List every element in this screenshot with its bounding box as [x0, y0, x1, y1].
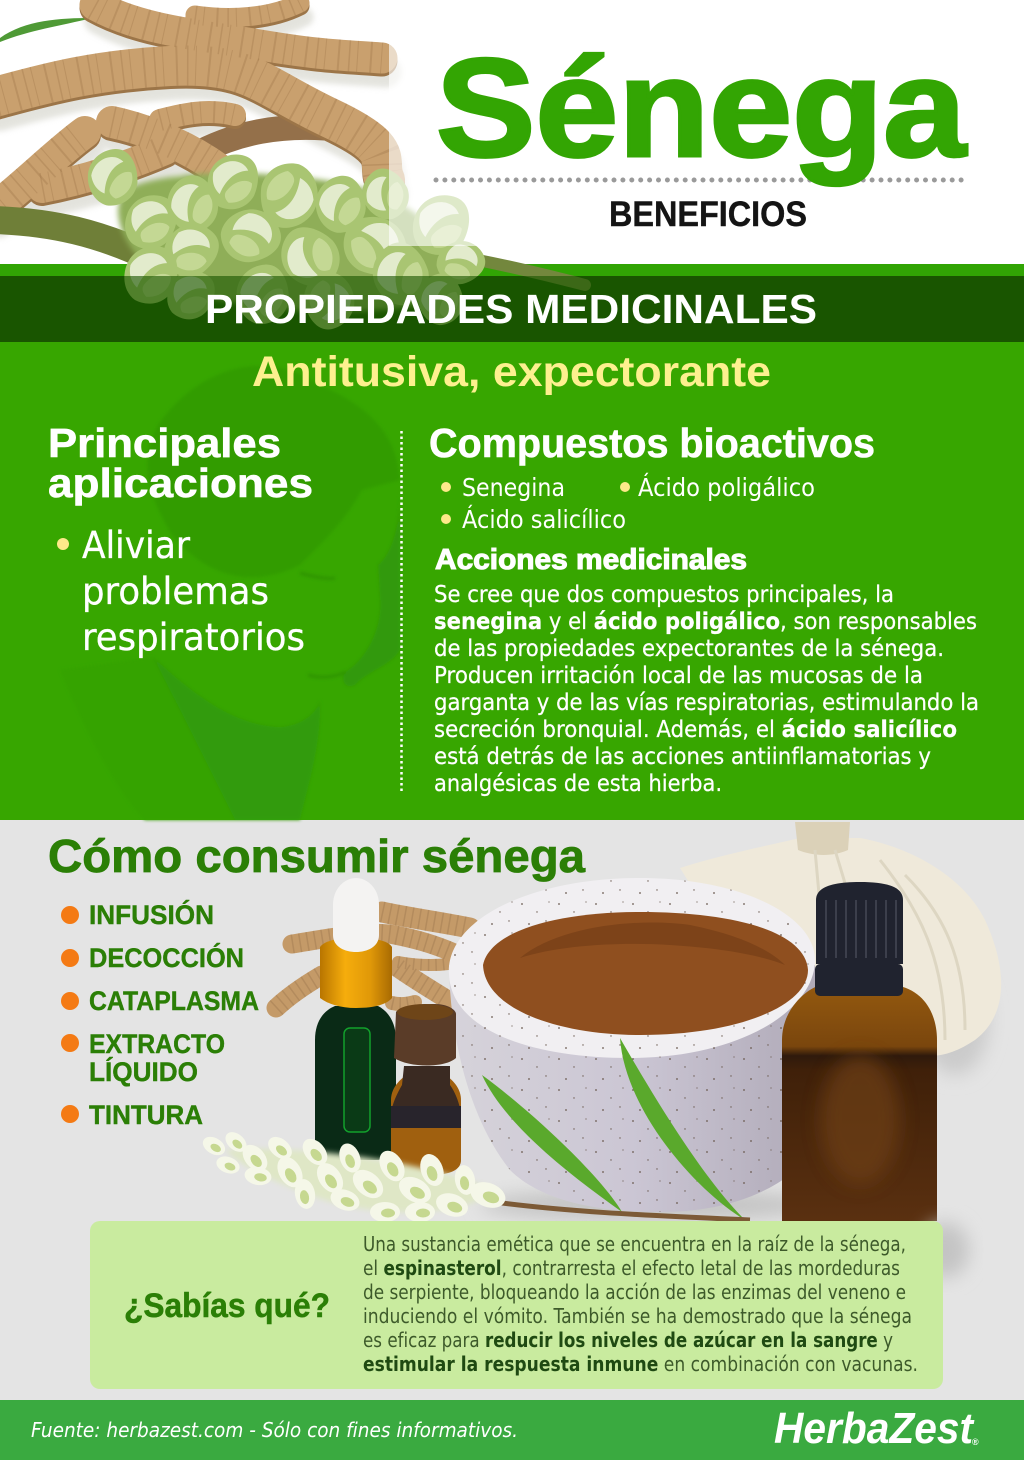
heading: [48, 420, 313, 506]
bowl body: [449, 965, 815, 1212]
root undersides: [0, 6, 385, 211]
paragraph: Producen irritación local de las mucosas de la: [434, 661, 923, 689]
branch tip: [395, 248, 585, 285]
callout text: [363, 1232, 918, 1376]
list: ways to consume: LÍQUIDO: [89, 1056, 198, 1087]
paragraph: garganta y de las vías respiratorias, estimulando la: [434, 688, 979, 716]
paragraph: secreción bronquial. Además, el ácido salicílico: [434, 715, 957, 743]
heading: medicinal properties: PROPIEDADES MEDICINALES: [205, 286, 817, 332]
dotted vertical divider: [400, 431, 403, 794]
callout text: el espinasterol, contrarresta el efecto letal de las mordeduras: [363, 1256, 900, 1280]
callout text: induciendo el vómito. También se ha demostrado que la sénega: [363, 1304, 912, 1328]
list: ways to consume: DECOCCIÓN: [89, 942, 244, 973]
dark root behind: [200, 127, 325, 152]
compounds list: Senegina: [462, 473, 565, 502]
root shadows: [0, 17, 389, 222]
icon: green dropper bottle: [315, 878, 396, 1160]
right leaf: [620, 1038, 745, 1220]
source text: Fuente: herbazest.com - Sólo con fines informativos.: [31, 1418, 518, 1442]
dark green title band: [0, 276, 1024, 342]
list: ways to consume: [61, 899, 259, 1130]
heading: aplicaciones: [48, 460, 313, 506]
mossy branch: [0, 220, 320, 262]
subheading: antitussive: Antitusiva, expectorante: [252, 348, 771, 396]
callout: did you know: [90, 1221, 943, 1389]
bowl rim specks: [449, 878, 815, 1058]
icon: small amber bottle: [391, 1004, 461, 1175]
dotted divider under title: [436, 178, 966, 182]
panel: main applications: [48, 420, 313, 659]
bowl shadow: [480, 1189, 820, 1221]
bowl specks: [449, 965, 815, 1212]
translucent white box over flowers: [389, 0, 589, 246]
illustration: senega roots and flowers: [0, 3, 585, 335]
heading: Compuestos bioactivos: [429, 420, 875, 466]
subtitle: BENEFICIOS: [609, 195, 807, 234]
paragraph: [434, 580, 979, 797]
callout text: es eficaz para reducir los niveles de azúcar en la sangre y: [363, 1328, 893, 1352]
application text: Aliviar: [82, 524, 191, 567]
bullet: [57, 538, 69, 550]
illustration: woman coughing silhouette: [60, 366, 400, 820]
subheading: medicinal actions: Acciones medicinales: [435, 544, 747, 576]
list: ways to consume: EXTRACTO: [89, 1029, 225, 1059]
illustration: remedies still life: [200, 822, 1001, 1278]
roots: [0, 3, 385, 208]
compounds list: [441, 473, 815, 534]
callout text: estimular la respuesta inmune en combinación con vacunas.: [363, 1352, 918, 1376]
roots behind bottles: [276, 912, 470, 1008]
flowering sprig: [200, 1128, 750, 1222]
compounds list: Ácido poligálico: [638, 473, 815, 502]
heading: how to consume: Cómo consumir sénega: [48, 830, 585, 882]
title: Sénega: [436, 29, 967, 186]
left leaf: [482, 1075, 622, 1212]
application text: problemas: [82, 570, 269, 613]
paragraph: Se cree que dos compuestos principales, la: [434, 580, 894, 608]
list: ways to consume: INFUSIÓN: [89, 899, 214, 930]
icon: large amber bottle: [782, 882, 937, 1221]
tea surface: [483, 912, 808, 1035]
flower cluster: [83, 146, 492, 335]
heading: Principales: [48, 420, 281, 466]
application text: respiratorios: [82, 616, 305, 659]
paragraph: analgésicas de esta hierba.: [434, 769, 722, 797]
tea reflection: [520, 923, 785, 965]
logo: HerbaZest: [774, 1404, 975, 1453]
application text: [82, 524, 305, 659]
footer: [0, 1400, 1024, 1460]
callout text: Una sustancia emética que se encuentra en la raíz de la sénega,: [363, 1232, 906, 1256]
page background: white header: [0, 0, 1024, 264]
translucent dark band over flowers: [0, 276, 1024, 342]
paragraph: senegina y el ácido poligálico, son responsables: [434, 607, 977, 635]
paragraph: está detrás de las acciones antiinflamatorias y: [434, 742, 931, 770]
icon: cloth poultice bag: [680, 822, 1001, 1075]
bowl rim: [449, 878, 815, 1058]
roots ridges: [276, 912, 470, 1008]
callout shadow: [921, 1222, 969, 1278]
paragraph: de las propiedades expectorantes de la sénega.: [434, 634, 944, 662]
list: ways to consume: TINTURA: [89, 1100, 203, 1130]
callout text: de serpiente, bloqueando la acción de las enzimas del veneno e: [363, 1280, 906, 1304]
list: ways to consume: CATAPLASMA: [89, 986, 259, 1016]
leaf at top left: [0, 18, 92, 42]
green band under header: [0, 264, 1024, 276]
compounds list: Ácido salicílico: [462, 505, 626, 534]
callout heading: ¿Sabías qué?: [124, 1287, 330, 1325]
panel: bioactive compounds: [429, 420, 979, 797]
panel: how to consume background: [0, 820, 1024, 1400]
panel: medicinal properties background: [0, 342, 1024, 820]
root ridges: [0, 3, 385, 208]
registered mark: ®: [972, 1437, 979, 1447]
